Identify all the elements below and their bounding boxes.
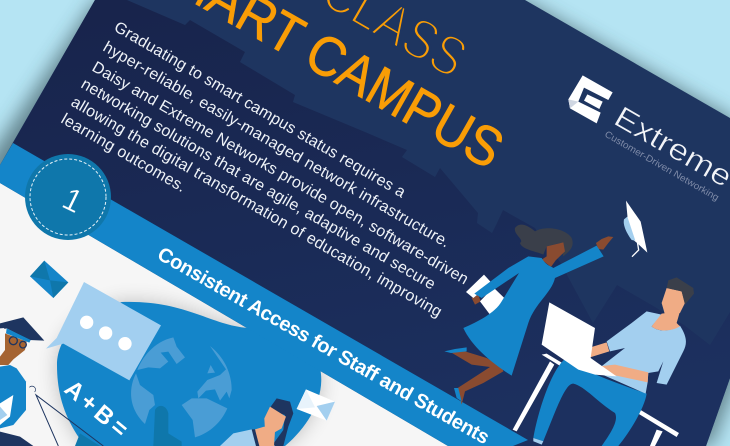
strap bbox=[252, 429, 259, 446]
face bbox=[264, 407, 286, 434]
face and neck bbox=[542, 242, 565, 267]
wordmark: Extreme bbox=[608, 100, 730, 194]
shoe bbox=[533, 438, 543, 445]
tablet bbox=[466, 275, 506, 315]
intro paragraph: Daisy and Extreme Networks provide open, software-driven bbox=[89, 59, 471, 288]
mortarboard bbox=[0, 317, 44, 341]
man with laptop bbox=[513, 277, 694, 446]
woman jumping bbox=[444, 225, 613, 405]
shirt bbox=[595, 311, 686, 394]
dress bbox=[463, 246, 604, 376]
white lower section bbox=[0, 183, 448, 446]
intro paragraph: learning outcomes. bbox=[58, 111, 189, 196]
intro paragraph: networking solutions that are agile, adaptive and secure bbox=[78, 76, 438, 294]
face bbox=[0, 333, 27, 365]
blue blob background bbox=[57, 302, 321, 446]
small envelope icon bbox=[30, 261, 68, 298]
formula: A + B = bbox=[59, 375, 133, 443]
neck bbox=[255, 427, 275, 446]
intro paragraph: Graduating to smart campus status requires a bbox=[111, 19, 408, 202]
shoes bbox=[444, 347, 467, 401]
body bbox=[220, 429, 275, 446]
dots bbox=[80, 316, 93, 329]
face bbox=[662, 288, 685, 315]
hands bbox=[472, 236, 613, 305]
logo mark bbox=[568, 75, 613, 123]
number badge: 1 bbox=[57, 180, 89, 220]
book bbox=[0, 395, 13, 425]
pointer ring bbox=[29, 386, 36, 392]
envelope bbox=[297, 389, 335, 421]
body bbox=[0, 365, 26, 428]
intro paragraph: hyper-reliable, easily-managed network infrastructure. bbox=[100, 39, 453, 251]
graduate figure bbox=[0, 317, 103, 446]
easel lines bbox=[36, 395, 103, 446]
trousers bbox=[533, 359, 647, 446]
glasses bbox=[9, 337, 26, 348]
skin bbox=[590, 311, 680, 382]
woman at bottom bbox=[153, 389, 335, 446]
globe bbox=[131, 337, 232, 437]
legs bbox=[451, 351, 503, 405]
banner heading: Consistent Access for Staff and Students bbox=[154, 243, 493, 446]
bench bbox=[513, 354, 679, 446]
speech bubble bbox=[46, 282, 161, 380]
hair bbox=[268, 398, 293, 446]
shadow figure bbox=[153, 406, 182, 446]
blue banner bbox=[0, 143, 528, 446]
hair bbox=[515, 225, 573, 256]
logo bbox=[568, 75, 730, 204]
icon: flying graduation cap bbox=[624, 201, 647, 257]
number badge bbox=[25, 154, 111, 240]
lap bbox=[0, 432, 33, 446]
hair bbox=[667, 277, 694, 305]
easel leg bbox=[75, 433, 100, 446]
intro paragraph: allowing the digital transformation of education, improving bbox=[68, 94, 445, 321]
tagline: Customer-Driven Networking bbox=[602, 129, 721, 204]
laptop bbox=[542, 302, 617, 376]
